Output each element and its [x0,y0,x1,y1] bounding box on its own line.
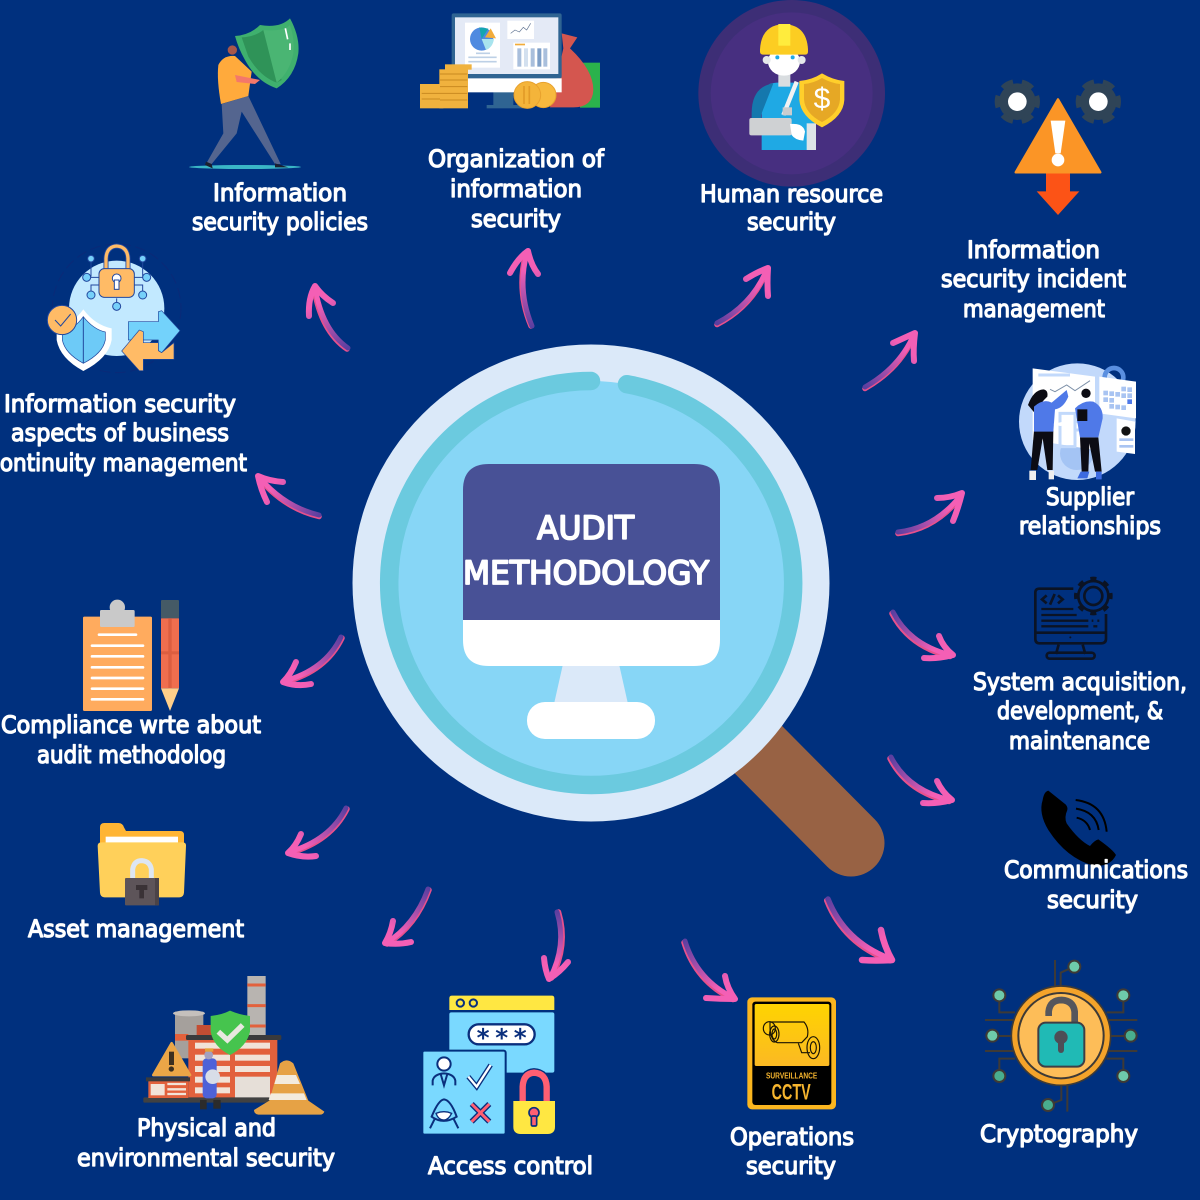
label: Physical and [137,1114,276,1142]
label [428,145,605,233]
label: environmental security [77,1144,335,1172]
icon: person carrying shield [189,18,301,169]
panel: information security incident management [941,82,1126,323]
arrow: to system acquisition [892,612,953,658]
label [1,711,261,769]
label: Asset management [28,915,244,943]
icon: factory, worker, shield and cone [143,976,324,1115]
monitor screen [463,464,720,620]
icon: login window, user check and padlock: *** [477,1024,527,1053]
magnifying glass with monitor [352,344,851,843]
label: Information [213,179,347,207]
arrow: to business continuity management [258,476,319,516]
monitor stand [554,664,628,704]
label: security [1047,886,1138,914]
icon: locked yellow folder [98,823,186,905]
label: Human resource [700,180,883,208]
label: security [747,208,836,236]
label: security [746,1152,836,1180]
panel: business continuity management [0,244,247,477]
title: AUDIT [537,509,634,547]
label: security [471,205,561,233]
label: information [450,175,582,203]
panel: system acquisition, development and maintenance [973,579,1187,755]
magnifier outer rim [352,344,830,822]
icon: telephone handset [1041,791,1116,866]
panel: human resource security [698,0,885,236]
label [700,180,883,236]
icon: two people at dashboard [1019,363,1136,480]
arrow: to information security incident management [865,333,915,388]
icon: CCTV surveillance sign: CCTV [772,1079,811,1104]
panel: organization of information security [420,13,605,233]
label: development, & [997,697,1163,725]
arrow: to human resource security [717,268,768,324]
arrow: to compliance [283,637,342,685]
label [973,668,1187,755]
label [192,179,368,236]
panel: communications security [1004,791,1188,914]
label: Operations [730,1123,854,1151]
label: Access control [428,1152,593,1180]
monitor base [527,702,655,739]
icon: globe with padlock, shield and arrows [47,244,181,373]
label: aspects of business [11,419,229,447]
icon: clipboard and pencil [83,600,179,711]
arrow: to cryptography [827,899,892,960]
title [463,509,709,592]
magnifier lens [389,381,793,785]
label: audit methodolog [37,741,226,769]
label: management [963,295,1105,323]
panel: physical and environmental security [77,976,335,1172]
icon: computer with code and gear [1035,579,1111,659]
label: Compliance wrte about [1,711,261,739]
panel: asset management [28,823,244,943]
label [0,390,247,477]
label: Cryptography [980,1120,1138,1148]
panel: supplier relationships [1019,363,1161,540]
label: Information [967,236,1100,264]
arrow: to supplier relationships [898,493,962,534]
icon: login window, user check and padlock [422,996,555,1135]
label: Communications [1004,856,1188,884]
panel: operations security [730,997,854,1180]
icon: CCTV surveillance sign [747,997,836,1109]
magnifier handle [720,711,851,843]
label [77,1114,335,1172]
label [1019,483,1161,540]
panel: compliance [1,600,261,769]
icon: worker with shield in purple circle: $ [814,82,831,115]
label [730,1123,854,1180]
arrow: to organization of information security [510,251,538,326]
icon: worker with shield in purple circle [698,0,885,187]
lens teal ring [389,381,793,785]
arrow: to access control [544,912,568,979]
panel: access control [422,996,593,1180]
title: METHODOLOGY [463,554,709,592]
icon: gears with warning triangle and down arrow [997,82,1118,215]
label: Information security [4,390,236,418]
label [941,236,1126,323]
panel: information security policies [189,18,368,236]
icon: CCTV surveillance sign: SURVEILLANCE [766,1071,818,1080]
label [1004,856,1188,914]
label: relationships [1019,512,1161,540]
icon: dashboard monitor with coins and money bag [420,13,600,108]
arrow: to asset management [288,808,347,857]
arrow: to communications security [890,757,952,803]
panel: cryptography [980,960,1138,1148]
label: Organization of [428,145,605,173]
label: Supplier [1046,483,1134,511]
label: security policies [192,208,368,236]
label: security incident [941,265,1126,293]
label: maintenance [1009,727,1150,755]
monitor body [463,620,720,666]
arrow: to physical and environmental security [385,889,429,944]
arrow: to operations security [684,941,735,1000]
arrow: to information security policies [309,286,348,349]
icon: open padlock with circuit [985,960,1137,1112]
